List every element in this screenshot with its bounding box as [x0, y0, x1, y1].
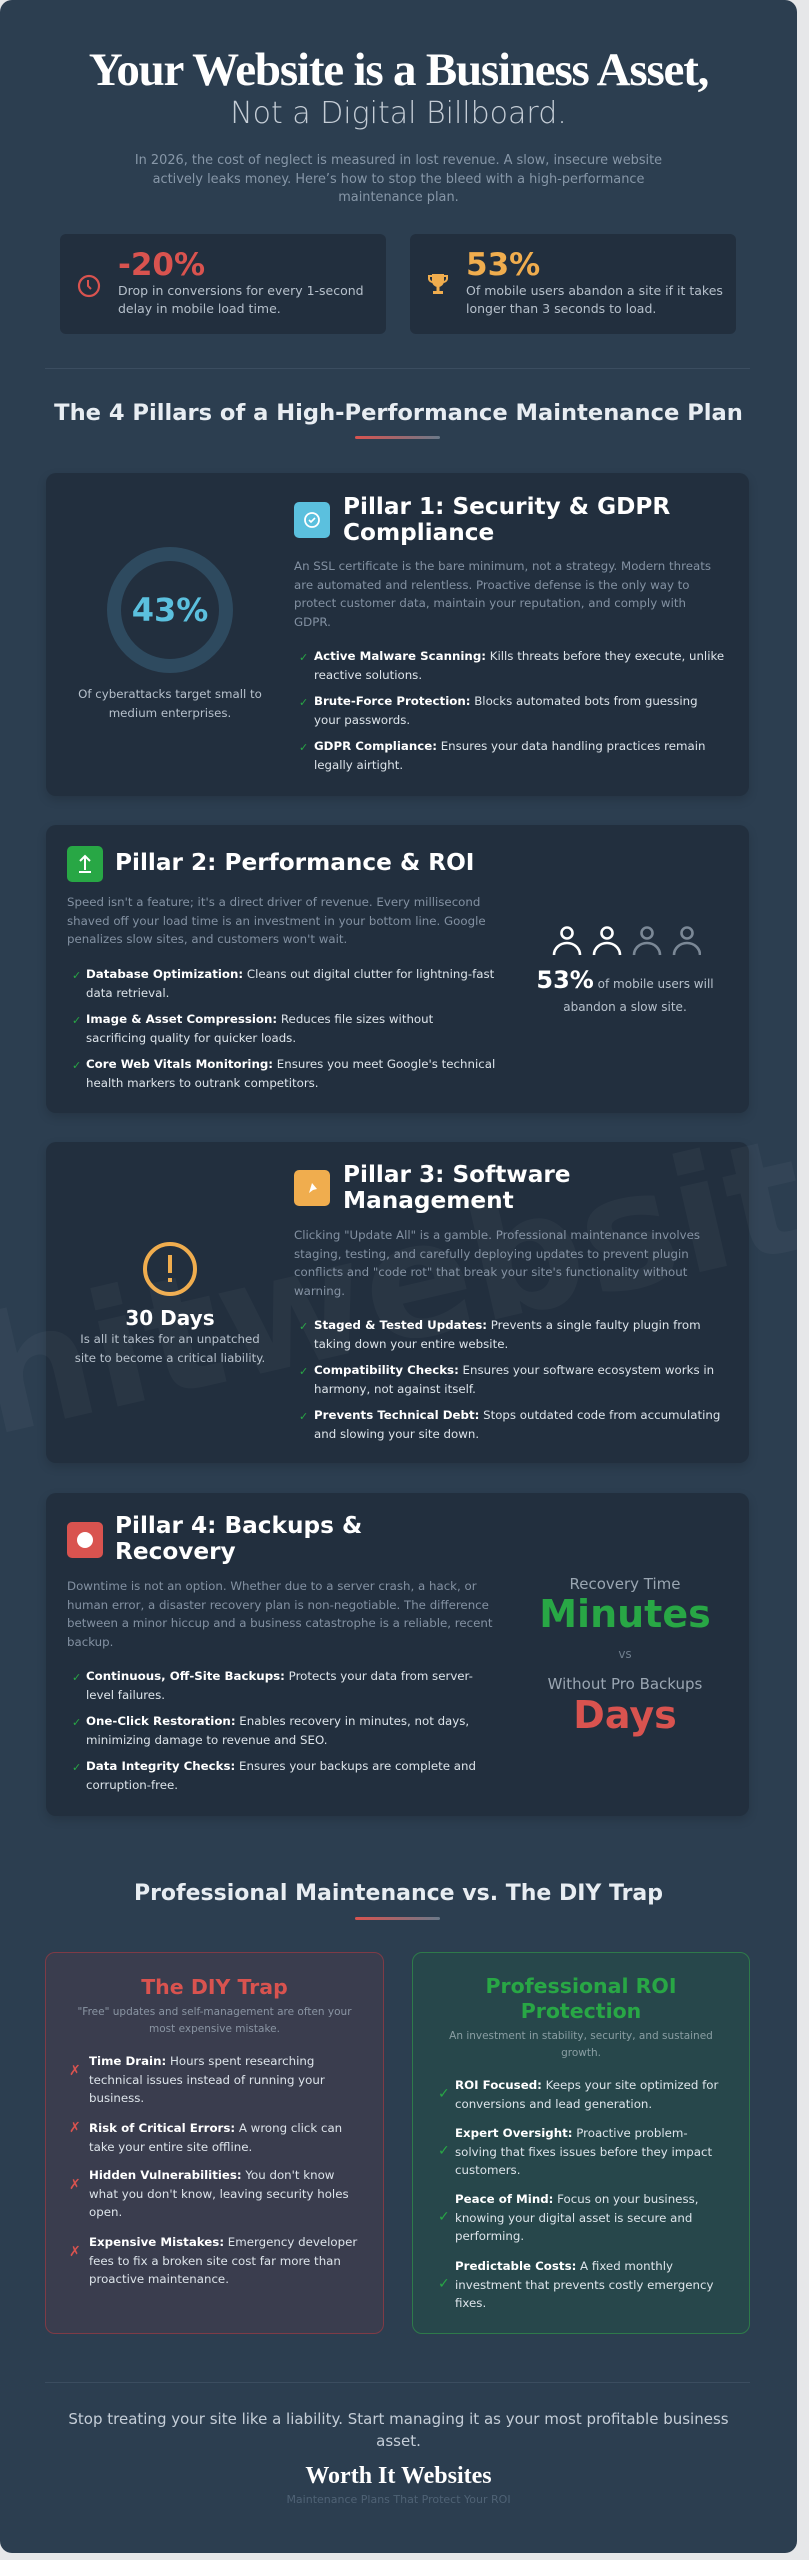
panel: professional ROI [412, 1952, 750, 2334]
bullet list: Prevents Technical Debt: Stops outdated code from accumulating [314, 1408, 720, 1422]
30 days stat: 30 Days [125, 1306, 215, 1330]
bullet list: harmony, not against itself. [314, 1382, 476, 1396]
pro subtitle: An investment in stability, security, and sustained [449, 2030, 713, 2042]
stat text [466, 283, 723, 316]
pillar 1 description: GDPR. [294, 615, 331, 629]
subtitle: Not a Digital Billboard. [230, 96, 567, 131]
bullet list: ✓ [72, 1059, 81, 1072]
panel: DIY trap: open. [89, 2205, 122, 2219]
stat number: -20% [118, 247, 205, 283]
heading: comparison: Professional Maintenance vs. The DIY Trap [134, 1881, 663, 1906]
pillar 3 title: Pillar 3: Software [343, 1161, 571, 1188]
pillar 3 description: staging, testing, and carefully deploying updates to prevent plugin [294, 1247, 689, 1261]
panel: DIY trap: Time Drain: Hours spent researching [89, 2054, 314, 2068]
panel: pillar 2 [46, 825, 749, 1113]
pillar 4 description [67, 1579, 492, 1649]
pillar 4 description: human error, a disaster recovery plan is non-negotiable. The difference [67, 1598, 489, 1612]
pillar 1 title: Pillar 1: Security & GDPR [343, 493, 670, 520]
panel: professional ROI: investment that prevents costly emergency [455, 2278, 713, 2292]
title: Your Website is a Business Asset, [89, 44, 708, 96]
pillar 2 description: penalizes slow sites, and customers won't wait. [67, 932, 347, 946]
30 days caption [75, 1332, 265, 1365]
pro subtitle: growth. [561, 2046, 601, 2058]
DIY subtitle: most expensive mistake. [149, 2022, 280, 2034]
panel: DIY trap: proactive maintenance. [89, 2272, 229, 2286]
panel: professional ROI: fixes. [455, 2296, 486, 2310]
icon: clock [78, 274, 100, 298]
pillar 3 description: conflicts and "code rot" that break your site's functionality without [294, 1265, 687, 1279]
ring chart 43%: 43% [132, 591, 208, 629]
recovery comparison [539, 1575, 711, 1737]
bullet list: Image & Asset Compression: Reduces file sizes without [86, 1012, 433, 1026]
bullet list [72, 1669, 476, 1792]
ring caption: medium enterprises. [109, 706, 231, 720]
panel: DIY trap [45, 1952, 384, 2334]
bullet list: Staged & Tested Updates: Prevents a single faulty plugin from [314, 1318, 701, 1332]
bullet list: ✓ [299, 741, 308, 754]
bullet list: ✓ [299, 1365, 308, 1378]
pillar 3 description: warning. [294, 1284, 345, 1298]
bullet list: Continuous, Off-Site Backups: Protects your data from server- [86, 1669, 473, 1683]
icon: trophy [428, 274, 448, 294]
bullet list: GDPR Compliance: Ensures your data handling practices remain [314, 739, 705, 753]
ring caption [78, 687, 262, 720]
stat 53% text [536, 966, 714, 1014]
panel: pillar 1: legally airtight. [314, 758, 403, 772]
pillar 3 description: Clicking "Update All" is a gamble. Professional maintenance involves [294, 1228, 700, 1242]
panel: professional ROI: customers. [455, 2163, 520, 2177]
bullet list: Core Web Vitals Monitoring: Ensures you meet Google's technical [86, 1057, 495, 1071]
bullet list: ✓ [299, 1320, 308, 1333]
bullet list: Database Optimization: Cleans out digital clutter for lightning-fast [86, 967, 494, 981]
pillar 4 title [115, 1512, 362, 1565]
pillar 4 title: Pillar 4: Backups & [115, 1512, 362, 1539]
stat text [118, 283, 364, 316]
ring chart 43% [107, 547, 233, 673]
panel: professional ROI: performing. [455, 2229, 524, 2243]
stat text: Of mobile users abandon a site if it takes [466, 283, 723, 298]
panel: professional ROI: solving that fixes issues before they impact [455, 2145, 712, 2159]
panel: DIY trap: take your entire site offline. [89, 2140, 252, 2154]
pillar 3 title [343, 1161, 571, 1214]
icon: backup [67, 1522, 103, 1558]
bullet list: minimizing damage to revenue and SEO. [86, 1733, 328, 1747]
pillar 1 description [294, 559, 711, 629]
pillar 2 description [67, 895, 486, 946]
panel: DIY trap: technical issues instead of running your [89, 2073, 325, 2087]
pro subtitle [449, 2030, 713, 2058]
panel: DIY trap: ✗ [69, 2244, 81, 2260]
icon: warning circle [143, 1242, 197, 1296]
bullet list: ✓ [72, 1671, 81, 1684]
bullet list: ✓ [72, 969, 81, 982]
pillar 4 description: backup. [67, 1635, 113, 1649]
brand name: Worth It Websites [305, 2463, 492, 2489]
panel: professional ROI: ✓ [438, 2143, 450, 2159]
bullet list: ✓ [299, 696, 308, 709]
DIY list: ✗ [69, 2063, 81, 2079]
panel: pillar 4 [46, 1493, 749, 1816]
intro text: maintenance plan. [338, 190, 459, 205]
bullet list: ✓ [299, 1410, 308, 1423]
pillar 1 title [343, 493, 670, 546]
recovery comparison: Recovery Time [569, 1575, 681, 1593]
recovery comparison: Minutes [539, 1592, 711, 1636]
people icons [552, 926, 701, 955]
panel: professional ROI: conversions and lead generation. [455, 2097, 652, 2111]
panel: DIY trap: business. [89, 2091, 144, 2105]
panel: DIY trap: Hidden Vulnerabilities: You don't know [89, 2168, 334, 2182]
pillar 3 description [294, 1228, 700, 1298]
heading: 4 pillars: The 4 Pillars of a High-Performance Maintenance Plan [54, 400, 743, 426]
panel: pillar 1 [46, 473, 749, 796]
closing statement: asset. [376, 2432, 421, 2450]
pillar 1 description: An SSL certificate is the bare minimum, not a strategy. Modern threats [294, 559, 711, 573]
bullet list: One-Click Restoration: Enables recovery in minutes, not days, [86, 1714, 469, 1728]
panel: professional ROI: Predictable Costs: A fixed monthly [455, 2259, 673, 2273]
stat card: 53% [410, 234, 736, 334]
30 days caption: Is all it takes for an unpatched [80, 1332, 260, 1346]
closing statement [68, 2410, 729, 2450]
brand tagline: Maintenance Plans That Protect Your ROI [286, 2493, 511, 2506]
icon: upload arrow [67, 846, 103, 882]
panel: professional ROI: ROI Focused: Keeps your site optimized for [455, 2078, 718, 2092]
stat text: delay in mobile load time. [118, 301, 281, 316]
bullet list: Compatibility Checks: Ensures your software ecosystem works in [314, 1363, 714, 1377]
stat text: longer than 3 seconds to load. [466, 301, 656, 316]
bullet list: taking down your entire website. [314, 1337, 508, 1351]
pillar 1 title: Compliance [343, 519, 494, 546]
bullet list: ✓ [72, 1014, 81, 1027]
30 days caption: site to become a critical liability. [75, 1351, 265, 1365]
bullet list: Active Malware Scanning: Kills threats before they execute, unlike [314, 649, 724, 663]
panel: DIY trap: ✗ [69, 2120, 81, 2136]
bullet list: reactive solutions. [314, 668, 422, 682]
bullet list: Brute-Force Protection: Blocks automated bots from guessing [314, 694, 698, 708]
stat card: -20% [60, 234, 386, 334]
panel: professional ROI: knowing your digital asset is secure and [455, 2211, 692, 2225]
bullet list: level failures. [86, 1688, 165, 1702]
panel: DIY trap: Risk of Critical Errors: A wrong click can [89, 2121, 342, 2135]
closing statement: Stop treating your site like a liability. Start managing it as your most profitable business [68, 2410, 729, 2428]
panel: pillar 3 [46, 1142, 749, 1463]
bullet list: data retrieval. [86, 986, 169, 1000]
stat 53% text: abandon a slow site. [563, 1000, 687, 1014]
bullet list [299, 649, 724, 772]
pillar 2 description: Speed isn't a feature; it's a direct driver of revenue. Every millisecond [67, 895, 480, 909]
pillar 4 description: Downtime is not an option. Whether due to a server crash, a hack, or [67, 1579, 477, 1593]
pillar 2 description: shaved off your load time is an investment in your bottom line. Google [67, 914, 486, 928]
bullet list: your passwords. [314, 713, 410, 727]
pro title: Protection [521, 1999, 641, 2023]
bullet list: ✓ [72, 1761, 81, 1774]
panel: DIY trap: what you don't know, leaving security holes [89, 2187, 349, 2201]
panel: professional ROI: ✓ [438, 2276, 450, 2292]
DIY title: The DIY Trap [141, 1975, 288, 1999]
panel: pillar 2: health markers to outrank competitors. [86, 1076, 319, 1090]
pillar 1 description: are automated and relentless. Proactive defense is the only way to [294, 578, 690, 592]
recovery comparison: Without Pro Backups [548, 1675, 702, 1693]
recovery comparison: Days [573, 1693, 677, 1737]
ring caption: Of cyberattacks target small to [78, 687, 262, 701]
panel: professional ROI: ✓ [438, 2209, 450, 2225]
pro title: Professional ROI [486, 1974, 676, 1998]
panel: professional ROI: Peace of Mind: Focus on your business, [455, 2192, 698, 2206]
panel: professional ROI: Expert Oversight: Proactive problem- [455, 2126, 688, 2140]
pillar 1 description: protect customer data, maintain your reputation, and comply with [294, 596, 686, 610]
bullet list: ✓ [299, 651, 308, 664]
bullet list: sacrificing quality for quicker loads. [86, 1031, 296, 1045]
intro text [135, 153, 662, 205]
panel: pillar 3: and slowing your site down. [314, 1427, 479, 1441]
DIY subtitle [77, 2006, 352, 2034]
pillar 4 description: between a minor hiccup and a business catastrophe is a reliable, recent [67, 1616, 492, 1630]
DIY subtitle: "Free" updates and self-management are often your [77, 2006, 352, 2018]
icon: software [294, 1170, 330, 1206]
panel: DIY trap: Expensive Mistakes: Emergency developer [89, 2235, 357, 2249]
pro list: ✓ [438, 2086, 450, 2102]
bullet list [72, 967, 495, 1090]
panel: pillar 4: corruption-free. [86, 1778, 178, 1792]
pro title [486, 1974, 676, 2023]
pillar 2 title: Pillar 2: Performance & ROI [115, 849, 474, 876]
stat text: Drop in conversions for every 1-second [118, 283, 364, 298]
panel: DIY trap: ✗ [69, 2177, 81, 2193]
pillar 4 title: Recovery [115, 1538, 236, 1565]
bullet list [299, 1318, 720, 1441]
intro text: actively leaks money. Here’s how to stop the bleed with a high-performance [153, 172, 644, 186]
icon: shield check [294, 502, 330, 538]
bullet list: ✓ [72, 1716, 81, 1729]
intro text: In 2026, the cost of neglect is measured in lost revenue. A slow, insecure website [135, 153, 662, 168]
recovery comparison: vs [618, 1647, 632, 1661]
panel: DIY trap: fees to fix a broken site cost far more than [89, 2254, 341, 2268]
stat number: 53% [466, 247, 540, 283]
bullet list: Data Integrity Checks: Ensures your backups are complete and [86, 1759, 476, 1773]
pillar 3 title: Management [343, 1187, 514, 1214]
stat 53% text: 53% of mobile users will [536, 966, 714, 994]
